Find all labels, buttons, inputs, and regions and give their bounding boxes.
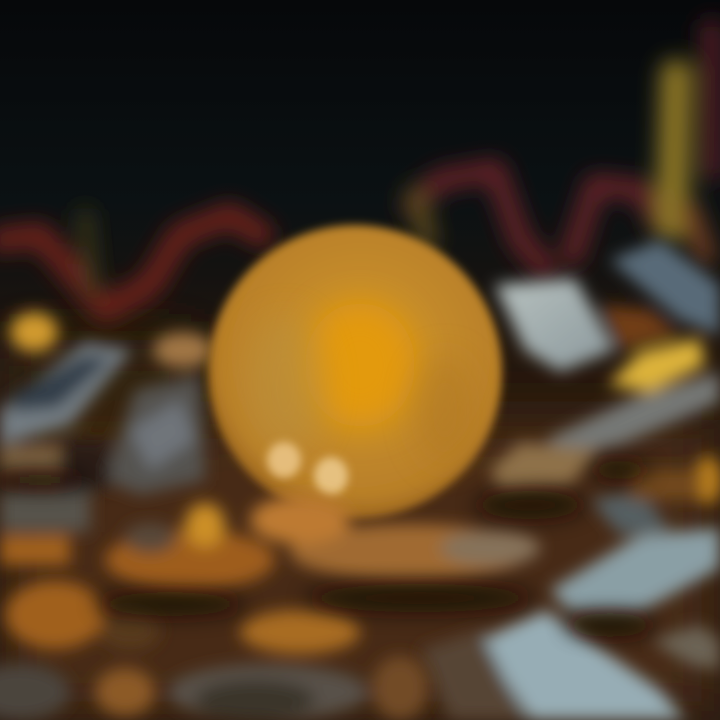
right silver and gold bars <box>420 240 720 720</box>
pile base <box>0 340 720 720</box>
left stack of bars <box>0 312 213 565</box>
dark gaps between objects <box>0 460 655 637</box>
coin centre symbol <box>305 303 415 427</box>
background <box>0 258 720 720</box>
chart lines <box>0 30 712 310</box>
foreground gold coins <box>0 496 540 720</box>
coin highlights <box>267 442 348 495</box>
gold coin <box>208 225 502 519</box>
